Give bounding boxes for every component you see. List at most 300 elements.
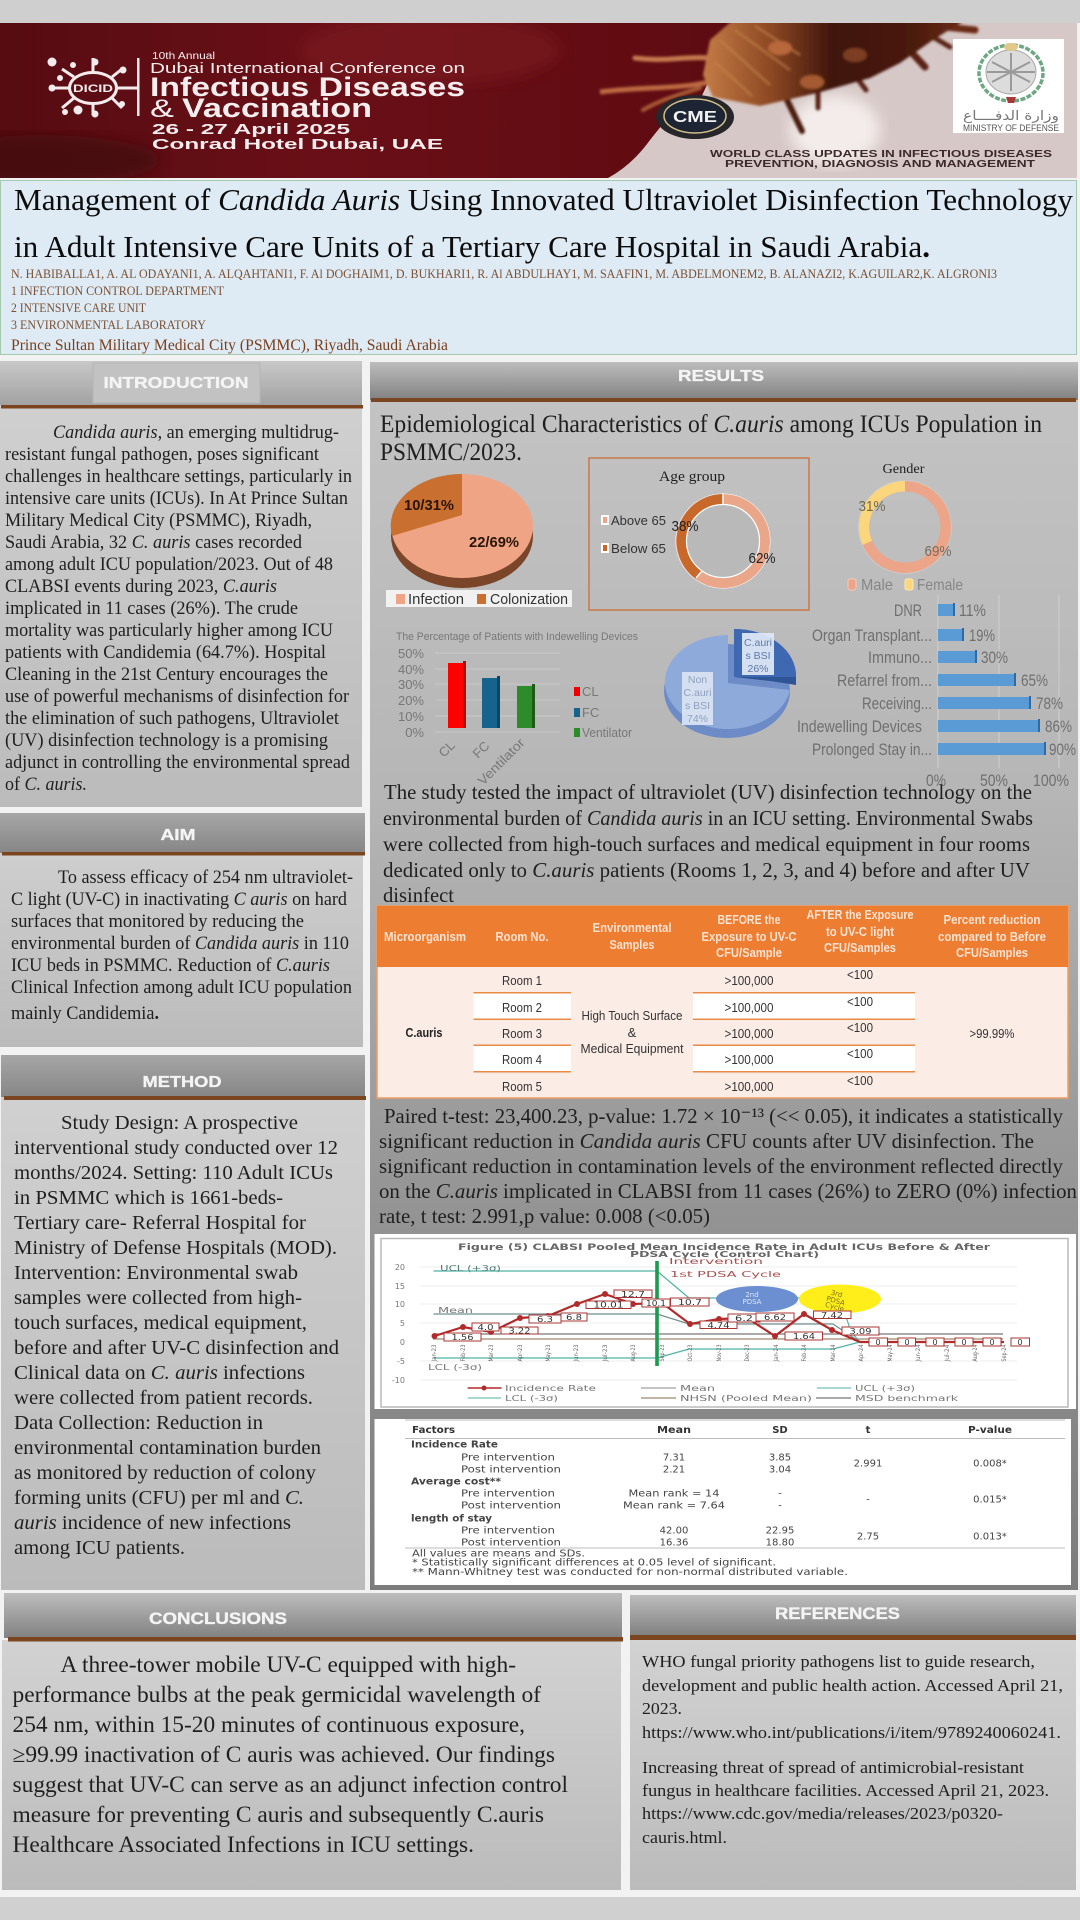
table header: Environmental — [592, 920, 672, 935]
conclusions text: 254 nm, within 15-20 minutes of continuous exposure, — [12, 1712, 525, 1737]
introduction text: patients with Candidemia (64.7%). Hospital — [5, 643, 326, 663]
paired t-test text: Paired t-test: 23,400.23, p-value: 1.72 × 10⁻¹³ (<< 0.05), it indicates a statistically — [384, 1104, 1063, 1128]
banner tagline: PREVENTION, DIAGNOSIS AND MANAGEMENT — [725, 159, 1035, 170]
table header: CFU/Samples — [824, 940, 896, 955]
chart: risk factor horizontal bars: 100% — [1033, 772, 1069, 790]
month axis labels: Jul-23 — [601, 1344, 609, 1362]
panel: results — [370, 362, 1078, 1590]
month axis labels: Aug-23 — [629, 1344, 637, 1362]
callout: 2nd PDSA — [716, 1286, 798, 1312]
chart: CLABSI control chart: 10.1 — [646, 1299, 666, 1308]
chart: CLABSI control chart: 1st PDSA Cycle — [670, 1270, 781, 1279]
table body: >99.99% — [970, 1026, 1015, 1041]
chart: risk factor horizontal bars: Refarrel from... — [837, 672, 932, 690]
chart: gender donut: 69% — [924, 543, 952, 560]
table header: Microorganism — [384, 929, 466, 944]
study description text: environmental burden of Candida auris in an ICU setting. Environmental Swabs — [383, 806, 1033, 830]
chart: indwelling devices bar chart: 50% — [398, 646, 424, 661]
chart: CLABSI control chart: 1.64 — [793, 1332, 815, 1341]
chart: CLABSI control chart: 5 — [400, 1319, 405, 1328]
aim text: surfaces that monitored by reducing the — [11, 912, 304, 932]
conclusions text: Healthcare Associated Infections in ICU settings. — [12, 1832, 474, 1857]
statistics header: Factors — [412, 1425, 455, 1436]
chart: infection vs colonization pie — [386, 474, 572, 608]
chart: CLABSI control chart: 7.42 — [821, 1311, 843, 1320]
method text: Data Collection: Reduction in — [14, 1412, 263, 1434]
icon: Ministry of Defense logo: MINISTRY OF DEFENSE — [963, 123, 1059, 133]
method text: environmental contamination burden — [14, 1437, 321, 1459]
conference title text: Vaccination — [182, 93, 372, 123]
chart: CLABSI control chart: 10 — [395, 1300, 405, 1309]
chart: risk factor horizontal bars — [797, 595, 1076, 790]
chart: age group donut: 38% — [672, 518, 698, 535]
aim text: mainly Candidemia. — [11, 1004, 159, 1024]
chart: risk factor horizontal bars: 19% — [969, 627, 995, 645]
chart: CLABSI control chart: 0 — [932, 1338, 938, 1347]
month axis labels: Nov-23 — [715, 1344, 723, 1362]
introduction text — [5, 423, 352, 795]
chart: CLABSI control chart: -5 — [397, 1357, 405, 1366]
table header: CFU/Samples — [956, 945, 1028, 960]
paired t-test text: rate, t test: 2.991,p value: 0.008 (<0.05) — [379, 1204, 710, 1228]
method text: among ICU patients. — [14, 1537, 185, 1559]
statistics rows: Pre intervention — [461, 1526, 555, 1536]
chart: infection vs colonization pie: 10/31% — [404, 497, 454, 514]
method text: Ministry of Defense Hospitals (MOD). — [14, 1237, 337, 1259]
chart legend: Mean — [680, 1384, 715, 1393]
chart: age group donut: 62% — [748, 550, 776, 567]
statistics rows: 0.008* — [973, 1458, 1007, 1470]
chart: indwelling devices bar chart: FC — [582, 705, 599, 720]
table body: Medical Equipment — [580, 1041, 684, 1056]
statistics rows: length of stay — [411, 1514, 492, 1524]
chart: risk factor horizontal bars: 65% — [1021, 672, 1048, 690]
chart: CLABSI control chart: 10.01 — [594, 1300, 624, 1310]
chart: risk factor horizontal bars: Immuno... — [868, 649, 932, 667]
chart: CLABSI control chart: 6.3 — [537, 1315, 553, 1324]
references text: fungus in healthcare facilities. Accessed April 21, 2023. — [642, 1781, 1049, 1800]
month axis labels: Jan-23 — [430, 1344, 438, 1362]
references text: development and public health action. Accessed April 21, — [642, 1676, 1063, 1695]
references text: 2023. — [642, 1699, 682, 1718]
banner tagline: WORLD CLASS UPDATES IN INFECTIOUS DISEASES — [710, 149, 1052, 160]
paired t-test text: on the C.auris implicated in CLABSI from 11 cases (26%) to ZERO (0%) infection — [379, 1179, 1077, 1203]
table: UV-C exposure results — [377, 906, 1068, 1098]
chart: CLABSI control chart: 3.09 — [850, 1327, 872, 1336]
statistics footnotes — [412, 1548, 848, 1578]
method text: Intervention: Environmental swab — [14, 1262, 298, 1284]
chart: BSI pie: 74% — [687, 713, 708, 725]
statistics rows: 2.75 — [857, 1532, 879, 1542]
chart legend: Incidence Rate — [505, 1384, 596, 1393]
statistics rows: Post intervention — [461, 1538, 561, 1548]
references text: Increasing threat of spread of antimicrobial-resistant — [642, 1758, 1024, 1777]
chart: CLABSI control chart: 1.56 — [452, 1333, 474, 1342]
conclusions text: A three-tower mobile UV-C equipped with high- — [60, 1652, 516, 1677]
table header: Room No. — [496, 929, 548, 944]
introduction text: Candida auris, an emerging multidrug- — [53, 423, 339, 443]
month axis labels: Jul-24 — [943, 1344, 951, 1362]
poster title: in Adult Intensive Care Units of a Tertiary Care Hospital in Saudi Arabia. — [14, 229, 930, 264]
method text: Clinical data on C. auris infections — [14, 1362, 305, 1384]
month axis labels: Oct-23 — [686, 1344, 694, 1362]
month axis labels: May-24 — [886, 1344, 894, 1362]
introduction text: among adult ICU population/2023. Out of 48 — [5, 555, 333, 575]
chart: risk factor horizontal bars: Receiving... — [862, 695, 932, 713]
chart: gender donut: 31% — [858, 498, 886, 515]
method text: were collected from patient records. — [14, 1387, 313, 1409]
aim text — [11, 868, 353, 1024]
authors and affiliations: 1 INFECTION CONTROL DEPARTMENT — [11, 284, 224, 298]
table: pre and post intervention statistics — [374, 1419, 1071, 1585]
chart: CLABSI control chart: 0 — [1017, 1338, 1023, 1347]
conference title text: 10th Annual — [152, 51, 215, 62]
bottom grey strip — [0, 1897, 1080, 1920]
chart: CLABSI control chart: LCL (-3σ) — [428, 1363, 482, 1372]
introduction text: adjunct in controlling the environmental spread — [5, 753, 351, 773]
chart: gender donut: Female — [917, 577, 963, 594]
statistics rows: 16.36 — [660, 1538, 688, 1548]
chart: CLABSI control chart: 0 — [400, 1338, 405, 1347]
introduction text: mortality was particularly higher among ICU — [5, 621, 333, 641]
paired t-test text: significant reduction in contamination levels of the environment reflected directly — [379, 1154, 1063, 1178]
introduction text: challenges in healthcare settings, particularly in — [5, 467, 352, 487]
references text: WHO fungal priority pathogens list to guide research, — [642, 1652, 1035, 1671]
table header: to UV-C light — [826, 924, 895, 939]
callout: 3rd PDSA: Cycle — [824, 1301, 845, 1313]
month axis labels: Jun-23 — [572, 1344, 580, 1362]
table body: & — [628, 1025, 637, 1040]
authors and affiliations: Prince Sultan Military Medical City (PSMMC), Riyadh, Saudi Arabia — [11, 337, 448, 354]
bars — [938, 604, 1045, 755]
method text: Tertiary care- Referral Hospital for — [14, 1212, 306, 1234]
method text: before and after UV-C disinfection and — [14, 1337, 339, 1359]
epidemiological heading: Epidemiological Characteristics of C.auris among ICUs Population in — [380, 411, 1042, 438]
chart: risk factor horizontal bars: Organ Transplant... — [812, 627, 932, 645]
panel: introduction — [0, 361, 363, 807]
chart: indwelling devices bar chart: 20% — [398, 693, 424, 708]
introduction text: Military Medical City (PSMMC), Riyadh, — [5, 511, 312, 531]
epidemiological heading: PSMMC/2023. — [380, 439, 522, 466]
chart: BSI pie — [664, 629, 796, 738]
table header: compared to Before — [938, 929, 1046, 944]
conference title text: Conrad Hotel Dubai, UAE — [152, 137, 444, 153]
top grey strip — [0, 0, 1080, 23]
chart: CLABSI control chart: UCL (+3σ) — [440, 1264, 501, 1273]
study description text: The study tested the impact of ultraviolet (UV) disinfection technology on the — [384, 780, 1032, 804]
table body: Room 4 — [502, 1052, 542, 1067]
month axis labels: Apr-23 — [516, 1344, 524, 1362]
method text: months/2024. Setting: 110 Adult ICUs — [14, 1162, 333, 1184]
study description text — [383, 780, 1033, 907]
table body: <100 — [847, 1020, 873, 1035]
paired t-test text: significant reduction in Candida auris CFU counts after UV disinfection. The — [379, 1129, 1034, 1153]
table body: <100 — [847, 1073, 873, 1088]
conference banner — [0, 15, 1077, 185]
chart: indwelling devices bar chart: 0% — [405, 725, 424, 740]
statistics rows: 7.31 — [663, 1452, 685, 1464]
conference title text: Dubai International Conference on — [150, 60, 465, 77]
chart: BSI pie: s BSI — [685, 700, 710, 712]
month axis labels: Apr-24 — [857, 1344, 865, 1362]
statistics rows: Mean rank = 7.64 — [623, 1500, 725, 1512]
table header: CFU/Sample — [716, 945, 782, 960]
table body: C.auris — [406, 1025, 442, 1040]
panel: conclusions — [2, 1593, 623, 1890]
aim text: C light (UV-C) in inactivating C auris on hard — [11, 890, 348, 910]
chart: indwelling devices bar chart: The Percentage of Patients with Indewelling Devices — [396, 631, 638, 643]
month axis labels: Feb-24 — [800, 1344, 808, 1362]
introduction text: use of powerful mechanisms of disinfection for — [5, 687, 349, 707]
heading: results: RESULTS — [678, 368, 764, 385]
table body: >100,000 — [724, 1052, 774, 1067]
chart: indwelling devices bar chart: 10% — [398, 709, 424, 724]
conclusions text: suggest that UV-C can serve as an adjunct infection control — [12, 1772, 568, 1797]
table body: High Touch Surface — [582, 1008, 682, 1023]
epidemiological heading — [380, 411, 1042, 466]
chart: BSI pie: 26% — [747, 663, 769, 675]
statistics rows: Pre intervention — [461, 1452, 555, 1464]
callout: 2nd PDSA: 2nd — [745, 1291, 759, 1299]
chart: CLABSI control chart: 12.7 — [621, 1290, 645, 1299]
icon: Ministry of Defense logo — [953, 39, 1064, 133]
chart: CLABSI control chart — [374, 1234, 1076, 1409]
chart: age group donut — [589, 458, 809, 610]
chart legend: MSD benchmark — [855, 1394, 959, 1403]
references text: https://www.cdc.gov/media/releases/2023/p0320- — [642, 1804, 1003, 1823]
method text: in PSMMC which is 1661-beds- — [14, 1187, 283, 1209]
statistics rows: 0.015* — [973, 1494, 1007, 1506]
introduction text: resistant fungal pathogen, poses significant — [5, 445, 320, 465]
table body: <100 — [847, 994, 873, 1009]
statistics header: P-value — [968, 1425, 1012, 1436]
chart: age group donut: Age group — [659, 469, 725, 485]
chart: CLABSI control chart: PDSA Cycle (Control Chart) — [630, 1250, 819, 1259]
chart: indwelling devices bar chart: Ventilator — [475, 735, 528, 788]
heading: aim: AIM — [160, 827, 196, 844]
statistics rows: 2.991 — [854, 1458, 882, 1470]
chart: risk factor horizontal bars: 86% — [1045, 718, 1072, 736]
icon: Ministry of Defense logo: وزارة الدفــــاع — [963, 109, 1059, 124]
icon: DICID logo — [48, 58, 140, 118]
method text: interventional study conducted over 12 — [14, 1137, 338, 1159]
method text — [14, 1112, 339, 1559]
chart: age group donut: Above 65 — [611, 513, 666, 528]
chart: CLABSI control chart: 4.74 — [708, 1321, 730, 1330]
statistics rows: Post intervention — [461, 1500, 561, 1512]
method text: forming units (CFU) per ml and C. — [14, 1487, 304, 1509]
chart: risk factor horizontal bars: 0% — [926, 772, 946, 790]
introduction text: Cleaning in the 21st Century encourages the — [5, 665, 328, 685]
statistics rows: 22.95 — [766, 1526, 794, 1536]
heading: method: METHOD — [142, 1074, 222, 1091]
table body: Room 1 — [502, 973, 542, 988]
references text — [642, 1652, 1063, 1847]
chart: CLABSI control chart: 6.8 — [566, 1313, 582, 1322]
chart: risk factor horizontal bars: 78% — [1036, 695, 1063, 713]
statistics rows: 42.00 — [660, 1526, 688, 1536]
conclusions text: performance bulbs at the peak germicidal wavelength of — [12, 1682, 541, 1707]
authors and affiliations: N. HABIBALLA1, A. AL ODAYANI1, A. ALQAHTANI1, F. Al DOGHAIM1, D. BUKHARI1, R. Al ABDULHAY1, M. SAAFIN1, M. ABDELMONEM2, B. ALANAZI2, K.AGUILAR2,K. ALGRONI3 — [11, 267, 997, 281]
aim text: ICU beds in PSMMC. Reduction of C.auris — [11, 956, 330, 976]
statistics rows: 18.80 — [766, 1538, 794, 1548]
table header: Percent reduction — [944, 912, 1041, 927]
table header: Samples — [610, 937, 654, 952]
panel: aim — [0, 813, 365, 1047]
method text: touch surfaces, medical equipment, — [14, 1312, 307, 1334]
statistics rows: 0.013* — [973, 1532, 1007, 1542]
chart: CLABSI control chart: 6.62 — [764, 1313, 786, 1322]
callout: 3rd PDSA: PDSA — [825, 1295, 846, 1307]
panel: method — [1, 1055, 366, 1590]
chart: BSI pie: C.auri — [683, 687, 712, 699]
heading: references: REFERENCES — [775, 1604, 900, 1623]
conclusions text: measure for preventing C auris and subsequently C.auris — [12, 1802, 544, 1827]
chart: risk factor horizontal bars: DNR — [894, 602, 922, 620]
statistics header — [412, 1425, 1012, 1436]
aim text: To assess efficacy of 254 nm ultraviolet- — [58, 868, 353, 888]
statistics rows: - — [778, 1488, 782, 1500]
statistics rows: - — [778, 1500, 782, 1512]
table header: BEFORE the — [718, 912, 780, 927]
month axis labels: Jan-24 — [772, 1344, 780, 1362]
conference title text — [150, 51, 465, 153]
chart: indwelling devices bar chart — [396, 631, 638, 788]
chart legend: UCL (+3σ) — [855, 1384, 915, 1393]
statistics rows: - — [866, 1494, 870, 1506]
statistics rows: Incidence Rate — [411, 1440, 498, 1450]
statistics rows — [411, 1440, 1007, 1548]
authors and affiliations: 2 INTENSIVE CARE UNIT — [11, 301, 146, 315]
chart: infection vs colonization pie: Infection — [408, 591, 464, 608]
chart: CLABSI control chart: 6.2 — [735, 1314, 753, 1323]
callout: 3rd PDSA: 3rd — [830, 1289, 843, 1299]
poster title — [14, 182, 1073, 264]
statistics rows: 3.85 — [769, 1452, 791, 1464]
statistics rows: 3.04 — [769, 1464, 791, 1476]
aim text: Clinical Infection among adult ICU population — [11, 978, 352, 998]
month axis labels: Mar-23 — [487, 1344, 495, 1362]
chart: CLABSI control chart: 0 — [989, 1338, 995, 1347]
icon: DICID logo: DICID — [73, 83, 113, 95]
month axis labels: Mar-24 — [829, 1344, 837, 1362]
table header: AFTER the Exposure — [806, 907, 914, 922]
chart: CLABSI control chart: 20 — [395, 1263, 405, 1272]
banner tagline — [710, 150, 1052, 168]
chart: infection vs colonization pie: Colonization — [490, 591, 568, 608]
chart: CLABSI control chart: Figure (5) CLABSI Pooled Mean Incidence Rate in Adult ICUs Before & After — [458, 1243, 991, 1253]
conference title text: 26 - 27 April 2025 — [152, 122, 350, 138]
chart: CLABSI control chart: 0 — [875, 1338, 881, 1347]
chart: risk factor horizontal bars: 30% — [981, 649, 1008, 667]
study description text: dedicated only to C.auris patients (Rooms 1, 2, 3, and 4) before and after UV — [383, 858, 1030, 882]
chart: infection vs colonization pie: 22/69% — [469, 534, 519, 551]
chart: gender donut: Gender — [882, 462, 925, 477]
callout: 2nd PDSA: PDSA — [743, 1298, 762, 1306]
month axis labels — [430, 1344, 1008, 1362]
panel: references — [630, 1595, 1076, 1890]
statistics footnotes: * Statistically significant differences at 0.05 level of significant. — [412, 1558, 776, 1568]
introduction text: implicated in 11 cases (26%). The crude — [5, 599, 298, 619]
chart: gender donut — [848, 462, 963, 594]
statistics rows: Post intervention — [461, 1464, 561, 1476]
table body: Room 3 — [502, 1026, 542, 1041]
table header — [384, 907, 1046, 960]
month axis labels: Aug-24 — [971, 1344, 979, 1362]
conclusions text — [12, 1652, 568, 1857]
chart: CLABSI control chart: -10 — [392, 1376, 405, 1385]
chart: BSI pie: C.auri — [744, 637, 772, 649]
authors and affiliations: 3 ENVIRONMENTAL LABORATORY — [11, 318, 206, 332]
aim text: environmental burden of Candida auris in 110 — [11, 934, 349, 954]
chart: CLABSI control chart: 10.7 — [678, 1298, 702, 1307]
chart: indwelling devices bar chart: CL — [436, 738, 458, 760]
chart: CLABSI control chart: Intervention — [669, 1257, 763, 1266]
chart legend: LCL (-3σ) — [505, 1394, 558, 1403]
chart: age group donut: Below 65 — [611, 541, 666, 556]
heading: introduction: INTRODUCTION — [104, 375, 248, 392]
statistics header: SD — [772, 1425, 788, 1436]
method text: auris incidence of new infections — [14, 1512, 291, 1534]
poster title: Management of Candida Auris Using Innovated Ultraviolet Disinfection Technology — [14, 182, 1073, 217]
chart: risk factor horizontal bars: 50% — [980, 772, 1008, 790]
table header: Exposure to UV-C — [702, 929, 797, 944]
table body: >100,000 — [724, 1026, 774, 1041]
month axis labels: Sep-24 — [1000, 1344, 1008, 1362]
method text: samples were collected from high- — [14, 1287, 302, 1309]
chart: gender donut: Male — [861, 577, 893, 594]
statistics footnotes: All values are means and SDs. — [412, 1548, 585, 1560]
heading: conclusions: CONCLUSIONS — [149, 1609, 287, 1628]
table body: >100,000 — [724, 973, 774, 988]
references text: cauris.html. — [642, 1828, 727, 1847]
chart: CLABSI control chart: 0 — [904, 1338, 910, 1347]
month axis labels: May-23 — [544, 1344, 552, 1362]
conference title text: Infectious Diseases — [150, 72, 465, 102]
chart: BSI pie: s BSI — [745, 650, 771, 662]
data labels — [444, 1290, 1030, 1346]
table body: >100,000 — [724, 1000, 774, 1015]
chart: indwelling devices bar chart: CL — [582, 684, 599, 699]
chart: indwelling devices bar chart: Ventilator — [582, 725, 633, 740]
callout: 3rd PDSA — [799, 1284, 881, 1314]
statistics rows: Pre intervention — [461, 1488, 555, 1500]
chart: CLABSI control chart: 0 — [961, 1338, 967, 1347]
panel: title block — [0, 180, 1076, 354]
chart: CLABSI control chart: 15 — [395, 1282, 405, 1291]
chart: indwelling devices bar chart: 40% — [398, 662, 424, 677]
chart: CLABSI control chart: 3.22 — [508, 1326, 530, 1336]
method text: Study Design: A prospective — [61, 1112, 298, 1134]
introduction text: (UV) disinfection technology is a promising — [5, 731, 328, 751]
statistics rows: Mean rank = 14 — [628, 1488, 720, 1500]
table body: Room 5 — [502, 1079, 542, 1094]
chart: CLABSI control chart: 4.0 — [478, 1323, 494, 1332]
statistics rows: Average cost** — [411, 1476, 502, 1488]
chart: indwelling devices bar chart: 30% — [398, 677, 424, 692]
table body: Room 2 — [502, 1000, 542, 1015]
table body: <100 — [847, 967, 873, 982]
introduction text: CLABSI events during 2023, C.auris — [5, 577, 277, 597]
chart: BSI pie: Non — [688, 674, 707, 686]
statistics header: Mean — [657, 1425, 691, 1436]
paired t-test text — [379, 1104, 1077, 1228]
table body: <100 — [847, 1046, 873, 1061]
study description text: were collected from high-touch surfaces and medical equipment in four rooms — [383, 832, 1030, 856]
chart: risk factor horizontal bars: Indewelling Devices — [797, 718, 922, 736]
chart legend: NHSN (Pooled Mean) — [680, 1394, 812, 1403]
introduction text: intensive care units (ICUs). In At Prince Sultan — [5, 489, 348, 509]
